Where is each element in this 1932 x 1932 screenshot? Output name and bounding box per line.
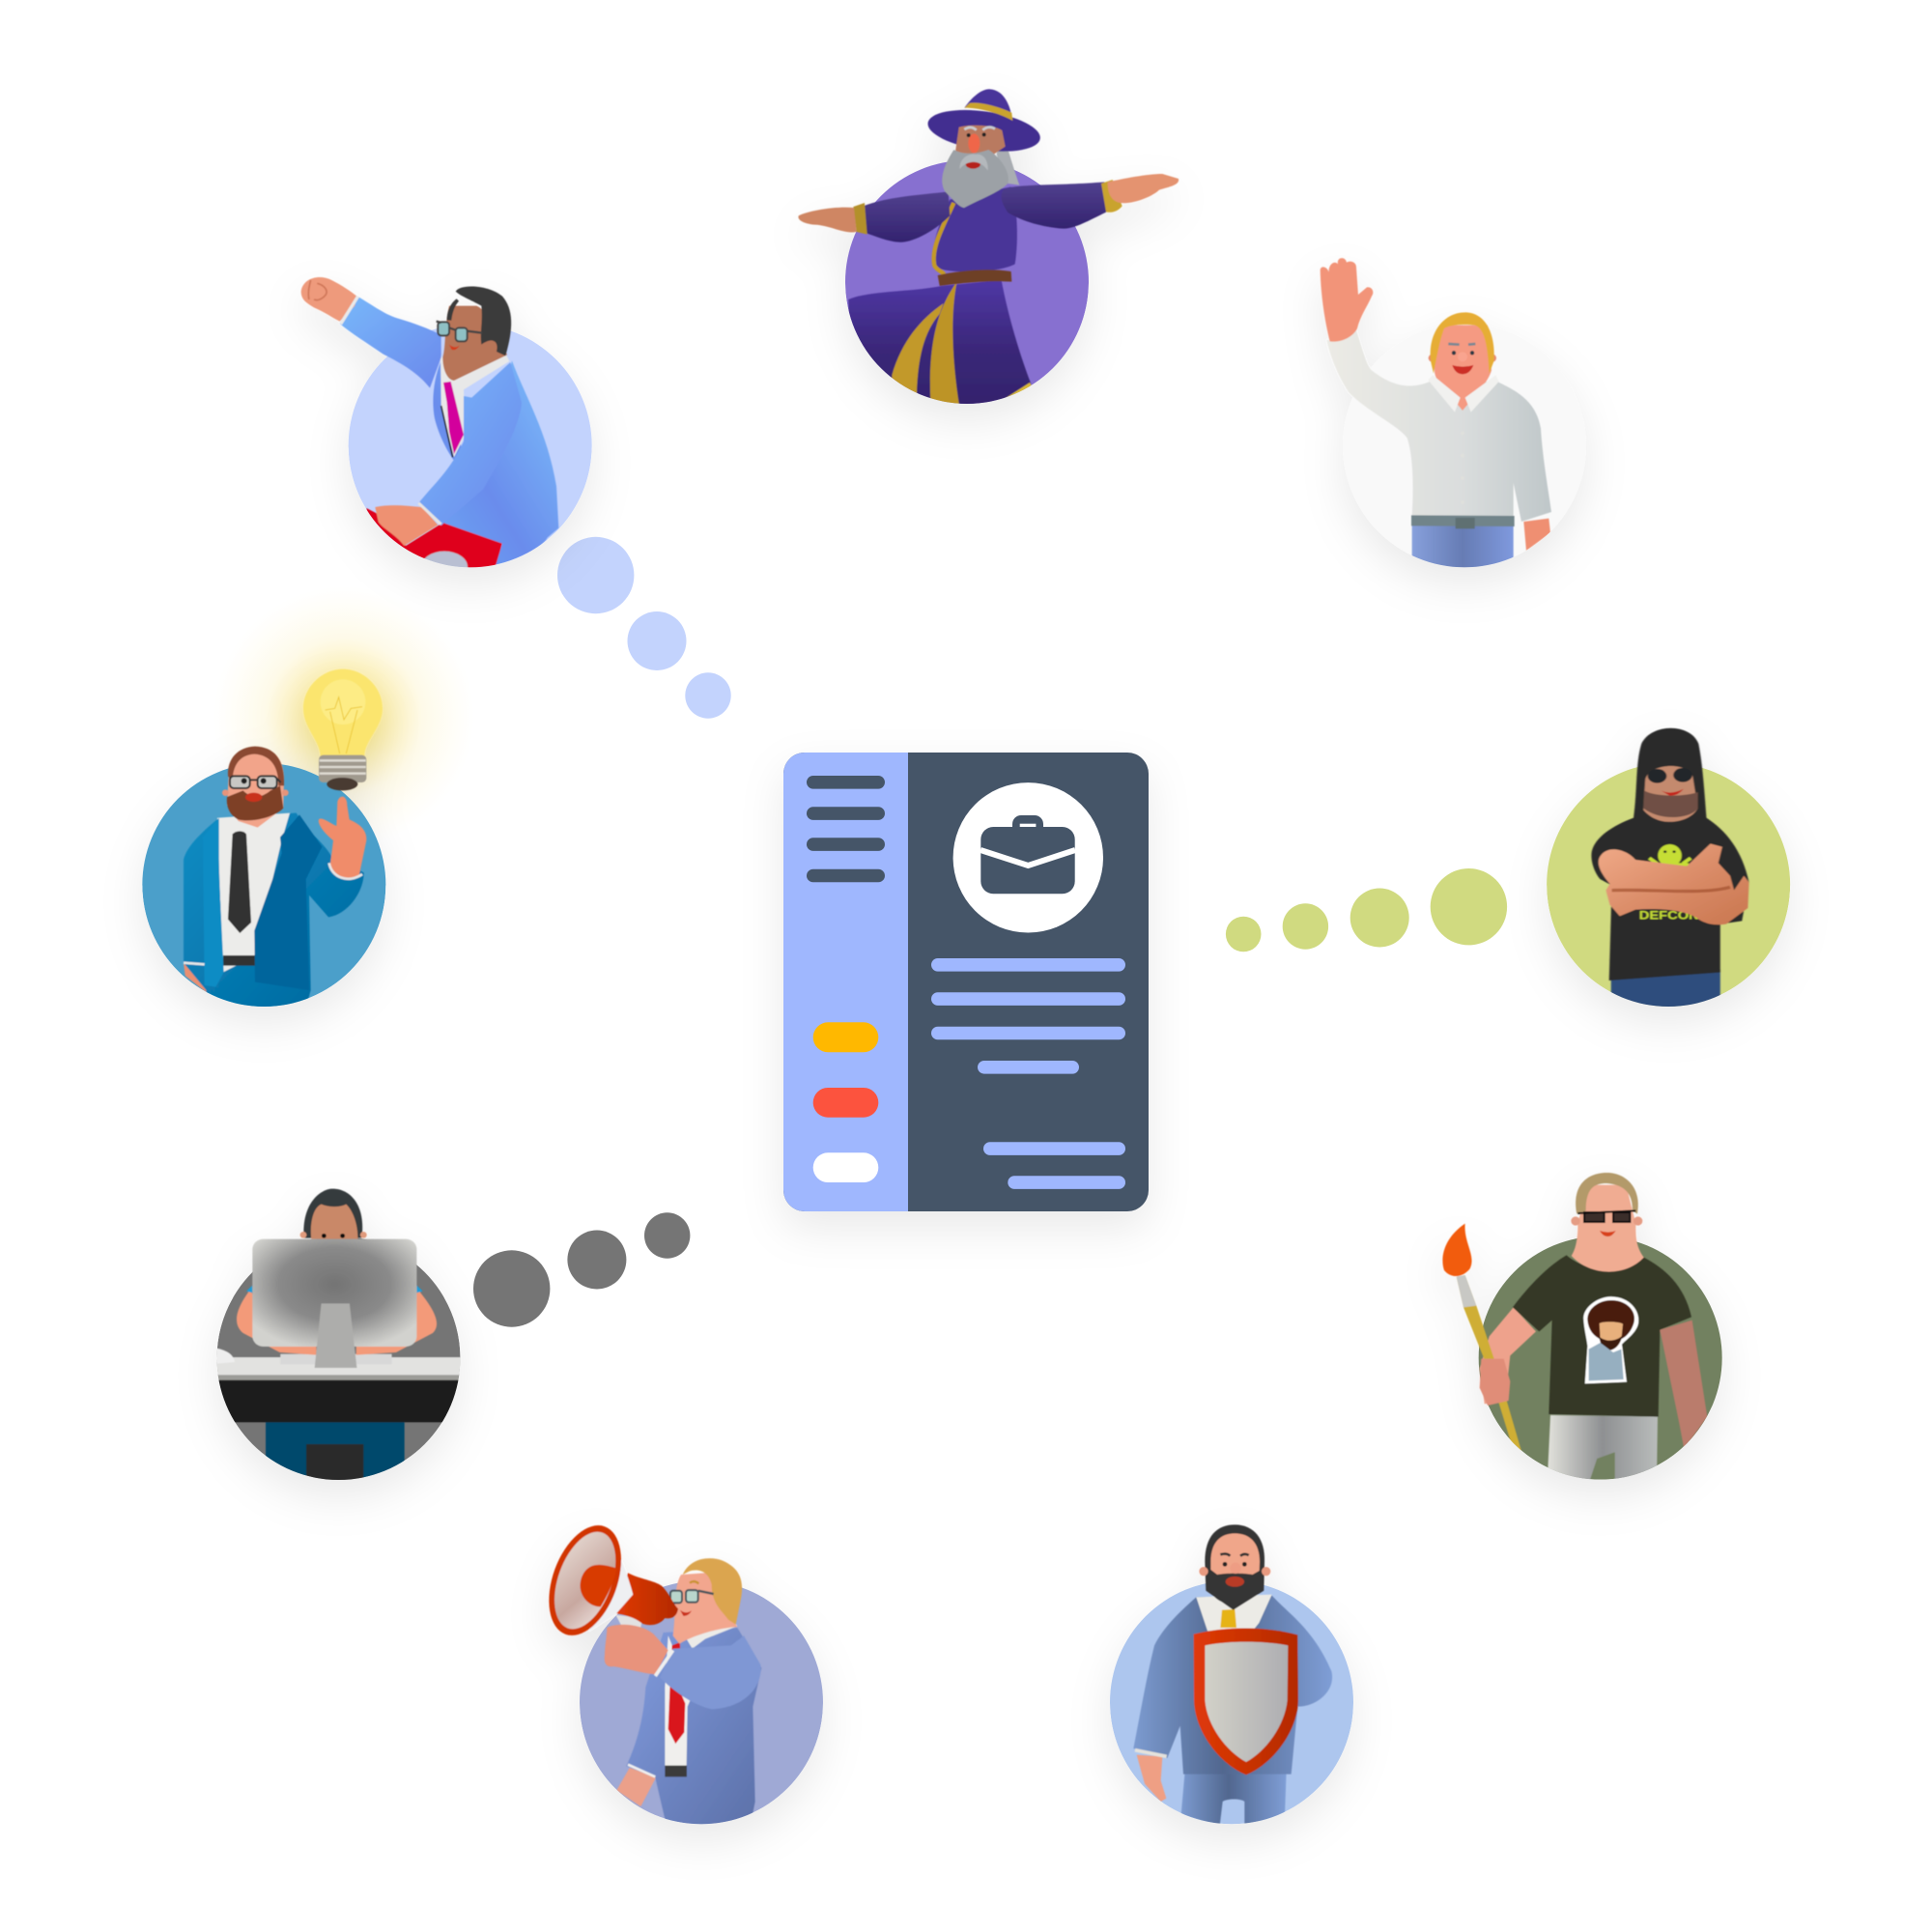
character: man in white shirt waving — [1321, 258, 1586, 573]
central job profile card — [783, 753, 1149, 1211]
character: bearded man with light bulb — [142, 586, 474, 1008]
shirt print text: DEFCON — [1639, 909, 1699, 922]
red pill — [813, 1088, 878, 1118]
yellow pill — [813, 1022, 878, 1052]
dotted connector: lime green — [1226, 868, 1507, 952]
character: man with megaphone — [535, 1516, 823, 1826]
dotted connector: grey — [473, 1212, 690, 1327]
white pill — [813, 1152, 878, 1182]
bulb glow — [213, 586, 474, 847]
card left sidebar — [783, 753, 908, 1211]
character: man in blue suit on scooter — [301, 277, 592, 582]
character: man behind computer — [213, 1189, 466, 1481]
profile text lines — [931, 958, 1125, 1189]
sidebar menu lines — [807, 776, 885, 882]
character: wizard — [798, 89, 1179, 409]
icon: briefcase in white circle — [953, 782, 1103, 933]
character: hooded man with crossed arms — [1547, 728, 1790, 1011]
character: bearded man with shield — [1110, 1524, 1353, 1826]
dotted connector: light blue — [557, 537, 731, 719]
character: man with paintbrush — [1442, 1173, 1722, 1483]
